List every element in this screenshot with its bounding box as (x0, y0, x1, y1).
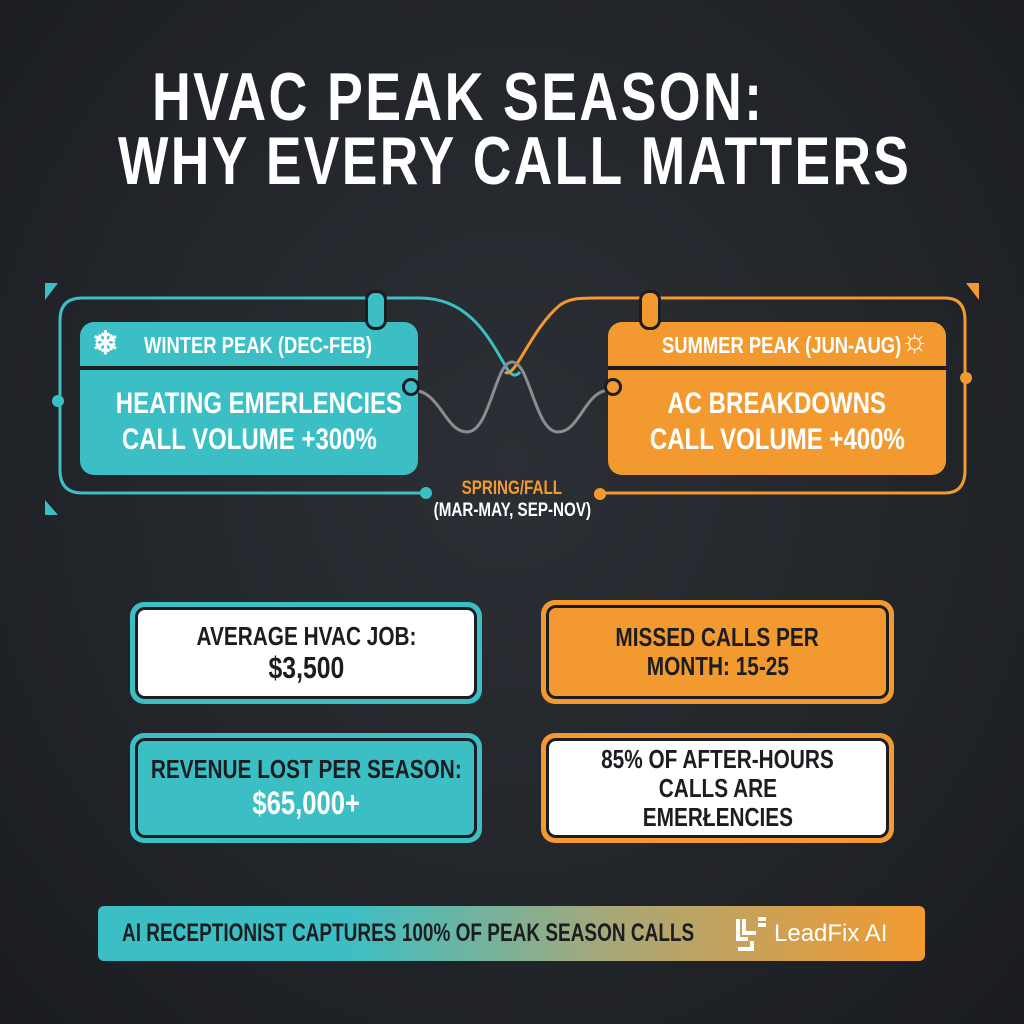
spring/fall label: SPRING/FALL (462, 478, 562, 499)
spring/fall label (433, 478, 591, 521)
stat: revenue lost (130, 733, 482, 843)
stat: average job (130, 602, 482, 704)
title: HVAC PEAK SEASON: (152, 59, 764, 135)
panel: summer peak: AC BREAKDOWNS (668, 387, 886, 420)
title (118, 59, 911, 199)
panel: summer peak: SUMMER PEAK (JUN-AUG) (662, 332, 901, 358)
stat: revenue lost: REVENUE LOST PER SEASON: (151, 754, 461, 784)
tab winter (365, 290, 387, 330)
stat: average job: $3,500 (268, 650, 344, 684)
panel: summer peak: CALL VOLUME +400% (650, 423, 904, 456)
stat: after-hours (541, 733, 894, 843)
stat: after-hours: CALLS ARE (658, 772, 777, 802)
connector dot winter (402, 378, 420, 396)
stat: missed calls: MONTH: 15-25 (646, 651, 789, 681)
bottom banner (98, 906, 925, 961)
stat: missed calls (541, 600, 894, 704)
stat: after-hours: EMERŁENCIES (642, 802, 793, 832)
logo (736, 917, 887, 951)
title: WHY EVERY CALL MATTERS (118, 123, 911, 199)
panel: winter peak: HEATING EMERLENCIES (116, 387, 402, 420)
stat: average job: AVERAGE HVAC JOB: (196, 620, 416, 650)
icon: snowflake: ❄ (92, 325, 119, 361)
panel: winter peak: CALL VOLUME +300% (122, 423, 376, 456)
panel: winter peak (80, 322, 418, 475)
panel: summer peak (608, 322, 946, 475)
stat: missed calls: MISSED CALLS PER (616, 622, 819, 652)
stat: revenue lost: $65,000+ (252, 784, 360, 820)
logo: LeadFix AI (774, 920, 887, 947)
icon: sun: ☼ (900, 322, 929, 358)
stat: after-hours: 85% OF AFTER-HOURS (601, 744, 834, 774)
panel: winter peak: WINTER PEAK (DEC-FEB) (144, 332, 372, 358)
tab summer (639, 290, 661, 330)
spring/fall label: (MAR-MAY, SEP-NOV) (433, 500, 591, 521)
connector dot summer (604, 378, 622, 396)
bottom banner: AI RECEPTIONIST CAPTURES 100% OF PEAK SEASON CALLS (122, 919, 694, 947)
